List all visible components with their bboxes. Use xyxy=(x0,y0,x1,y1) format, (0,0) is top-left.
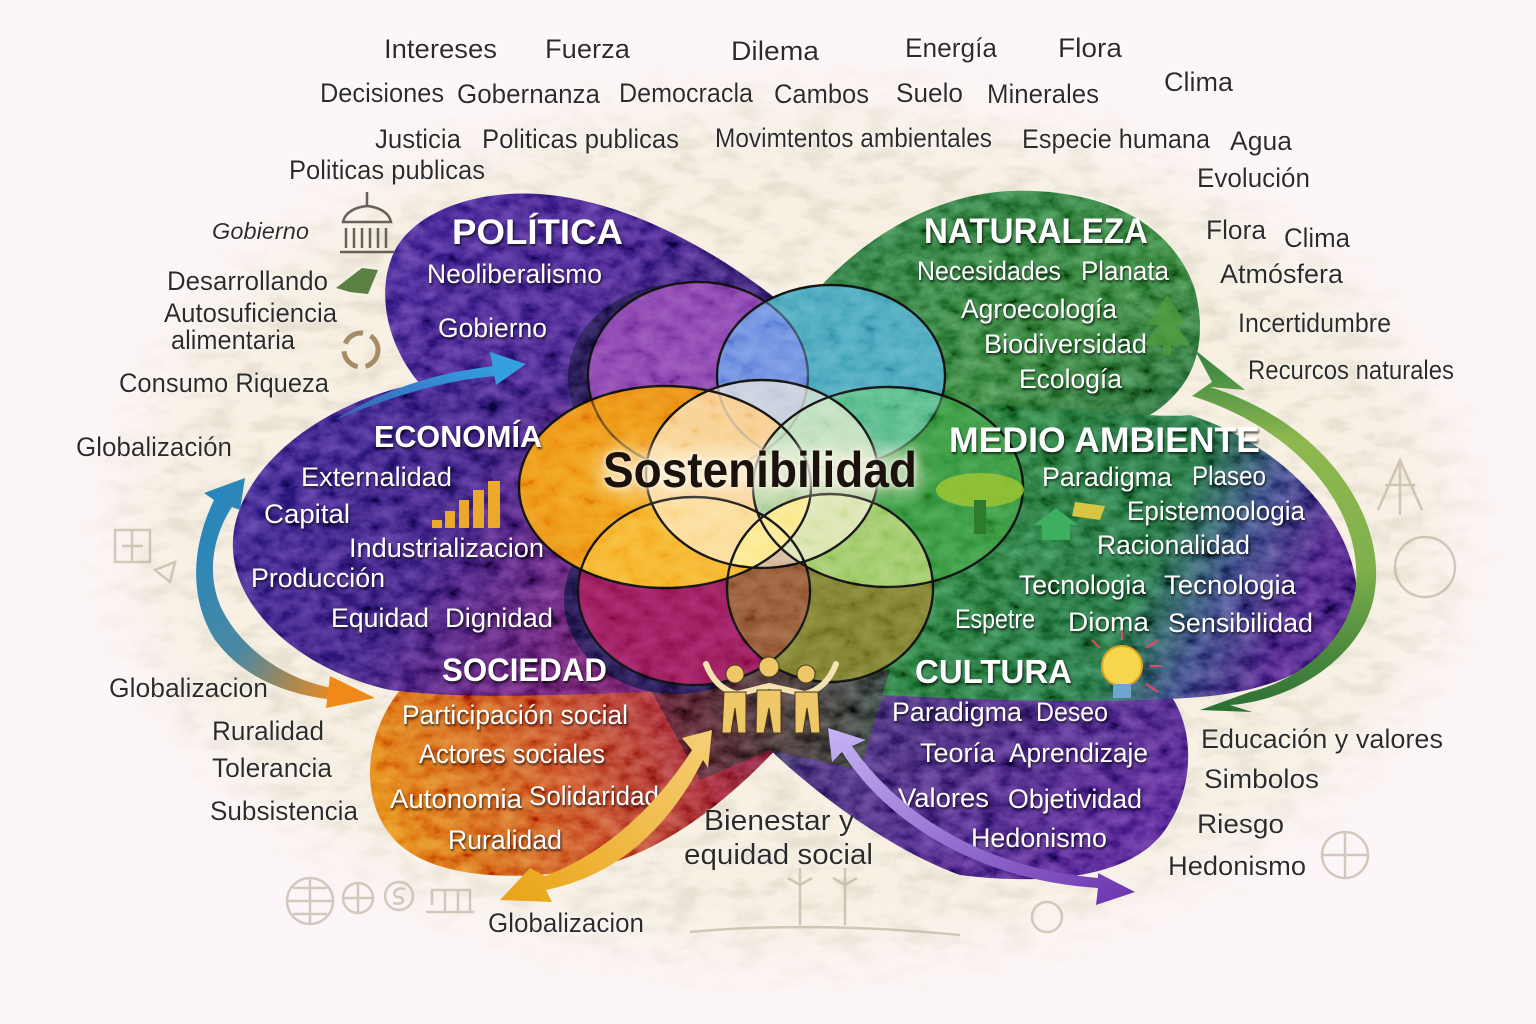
top keyword cloud: Decisiones xyxy=(320,78,444,108)
panel labels: Cultura: Paradigma xyxy=(892,697,1023,727)
panel labels: Economía: Capital xyxy=(264,499,350,529)
top keyword cloud xyxy=(289,33,1310,193)
panel labels: Economía: ECONOMÍA xyxy=(374,419,542,454)
right keyword cloud: Recurcos naturales xyxy=(1248,355,1454,385)
petal: Medio ambiente xyxy=(800,400,1357,701)
right keyword cloud: Educación y valores xyxy=(1201,724,1443,754)
lens overlap: centre, orange and olive xyxy=(732,497,809,566)
panel labels: Cultura: Valores xyxy=(898,783,989,813)
icon: recycle xyxy=(344,333,378,367)
panel labels: Medio ambiente: Tecnologia xyxy=(1164,570,1297,600)
panel labels: Naturaleza: Biodiversidad xyxy=(984,329,1147,359)
arrow: Naturaleza to Cultura xyxy=(1192,350,1376,712)
top keyword cloud: Flora xyxy=(1058,33,1123,63)
panel labels: Medio ambiente: MEDIO AMBIENTE xyxy=(949,421,1260,460)
arrow: Economía to Sociedad (double head) xyxy=(196,478,375,708)
top keyword cloud: Clima xyxy=(1164,67,1234,97)
bottom keywords: equidad social xyxy=(684,839,873,871)
right keyword cloud: Incertidumbre xyxy=(1238,308,1391,338)
panel labels: Economía xyxy=(251,419,553,633)
faint background icons xyxy=(115,460,1455,935)
panel labels: Naturaleza: Necesidades xyxy=(917,256,1061,286)
icon: book xyxy=(1072,502,1105,520)
panel labels: Naturaleza: Ecología xyxy=(1019,364,1123,394)
central overlapping lenses xyxy=(519,282,1023,685)
panel labels: Sociedad: Participación social xyxy=(402,700,628,730)
icon: house xyxy=(1034,508,1078,540)
left keyword cloud: Subsistencia xyxy=(210,796,359,826)
top keyword cloud: Minerales xyxy=(987,79,1099,109)
panel labels: Medio ambiente: Sensibilidad xyxy=(1168,608,1313,638)
icon: people group xyxy=(706,657,836,733)
panel labels: Medio ambiente: Dioma xyxy=(1068,607,1150,637)
top keyword cloud: Energía xyxy=(905,33,998,63)
panel labels: Cultura: Objetividad xyxy=(1008,784,1142,814)
panel labels: Economía: Industrializacion xyxy=(349,533,544,563)
lens outlines xyxy=(519,380,1023,685)
panel labels: Política: Neoliberalismo xyxy=(427,259,602,289)
panel labels: Política: Gobierno xyxy=(438,313,547,343)
lens: olive xyxy=(727,494,933,682)
panel labels: Medio ambiente: Epistemoologia xyxy=(1127,496,1306,526)
lens overlap: orange and crimson xyxy=(582,499,758,587)
panel labels: Sociedad: Autonomia xyxy=(390,784,523,814)
left keyword cloud: Autosuficiencia xyxy=(164,298,338,328)
panel labels: Cultura: Hedonismo xyxy=(971,823,1107,853)
lens: crimson xyxy=(578,497,810,685)
left keyword cloud xyxy=(76,218,359,826)
lens: orange xyxy=(519,386,811,588)
lens: green xyxy=(753,387,1023,587)
icon: tree Medio ambiente xyxy=(936,473,1024,534)
dark patch under the lower lenses xyxy=(640,670,890,780)
panel labels: Cultura xyxy=(892,653,1148,853)
panel labels: Cultura: Deseo xyxy=(1036,697,1108,727)
right keyword cloud: Atmósfera xyxy=(1220,259,1344,289)
icon: tree Naturaleza xyxy=(1144,295,1190,355)
panel labels: Economía: Dignidad xyxy=(445,603,553,633)
panel labels: Naturaleza: NATURALEZA xyxy=(924,212,1148,251)
panel labels: Política: POLÍTICA xyxy=(452,212,623,252)
top keyword cloud: Cambos xyxy=(774,79,869,109)
lens: teal xyxy=(717,285,945,467)
panel labels: Cultura: Aprendizaje xyxy=(1009,738,1148,768)
petal texture overlay xyxy=(220,180,1370,890)
left keyword cloud: Globalización xyxy=(76,432,232,462)
panel labels: Naturaleza xyxy=(917,212,1170,394)
top keyword cloud: Agua xyxy=(1230,126,1293,156)
panel labels: Cultura: CULTURA xyxy=(915,653,1072,690)
top keyword cloud: Democracla xyxy=(619,78,754,108)
dark shadow crescents behind the lenses xyxy=(564,284,792,694)
top keyword cloud: Evolución xyxy=(1197,163,1310,193)
icon: light bulb xyxy=(1092,630,1162,698)
left keyword cloud: Globalizacion xyxy=(109,673,268,703)
top keyword cloud: Fuerza xyxy=(545,34,631,64)
panel labels: Medio ambiente: Paradigma xyxy=(1042,462,1173,492)
panel labels: Medio ambiente: Plaseo xyxy=(1192,461,1266,491)
bottom keywords: Bienestar y xyxy=(704,805,855,837)
top keyword cloud: Dilema xyxy=(731,36,820,66)
right keyword cloud: Riesgo xyxy=(1197,809,1284,839)
left keyword cloud: Ruralidad xyxy=(212,716,324,746)
icon: bar chart xyxy=(432,481,500,528)
petal: Economía xyxy=(233,381,700,696)
panel labels: Sociedad: Ruralidad xyxy=(448,825,562,855)
left keyword cloud: Gobierno xyxy=(212,218,309,244)
panel labels: Medio ambiente: Racionalidad xyxy=(1097,530,1250,560)
icon: government building xyxy=(340,192,394,252)
panel labels: Cultura: Teoría xyxy=(920,738,996,768)
top keyword cloud: Suelo xyxy=(896,78,963,108)
lens: centre xyxy=(646,380,878,568)
purple and teal edges seen through the upper lenses xyxy=(588,282,945,470)
petal: Sociedad xyxy=(370,660,780,876)
panel labels: Sociedad: SOCIEDAD xyxy=(442,652,607,688)
panel labels: Medio ambiente: Tecnologia xyxy=(1019,570,1147,600)
top keyword cloud: Especie humana xyxy=(1022,124,1211,154)
petal: Política xyxy=(385,193,790,420)
left keyword cloud: Consumo Riqueza xyxy=(119,368,330,398)
panel labels: Sociedad: Actores sociales xyxy=(419,739,605,769)
bottom keywords xyxy=(488,805,873,938)
arrow: Cultura to Hedonismo (double head) xyxy=(828,728,1135,905)
lens overlap: purple and teal xyxy=(716,302,808,424)
right keyword cloud xyxy=(1168,215,1454,881)
panel labels: Medio ambiente xyxy=(949,421,1313,638)
top keyword cloud: Politicas publicas xyxy=(289,155,485,185)
left keyword cloud: alimentaria xyxy=(171,325,296,355)
panel labels: Medio ambiente: Espetre xyxy=(955,604,1035,634)
right keyword cloud: Hedonismo xyxy=(1168,851,1306,881)
arrow: Economía to Política xyxy=(335,352,526,420)
panel labels: Economía: Producción xyxy=(251,563,385,593)
lens overlap: crimson and olive xyxy=(728,550,809,658)
bottom keywords: Globalizacion xyxy=(488,908,644,938)
petal: Cultura xyxy=(760,670,1188,879)
lens texture overlay xyxy=(510,270,1030,700)
top keyword cloud: Intereses xyxy=(384,34,497,64)
right keyword cloud: Flora xyxy=(1206,215,1267,245)
top keyword cloud: Politicas publicas xyxy=(482,124,679,154)
panel labels: Naturaleza: Planata xyxy=(1081,256,1170,286)
lens: purple xyxy=(588,282,808,470)
right keyword cloud: Simbolos xyxy=(1204,764,1319,794)
lens overlap: green and olive xyxy=(783,495,932,586)
top keyword cloud: Gobernanza xyxy=(457,79,601,109)
panel labels: Economía: Externalidad xyxy=(301,462,452,492)
right keyword cloud: Clima xyxy=(1284,223,1351,253)
petal: Naturaleza xyxy=(808,191,1200,450)
arrow: Sociedad to Globalización (double head) xyxy=(500,730,712,902)
left keyword cloud: Tolerancia xyxy=(212,753,333,783)
panel labels: Naturaleza: Agroecología xyxy=(961,294,1118,324)
panel labels: Economía: Equidad xyxy=(331,603,429,633)
panel labels: Política xyxy=(427,212,623,343)
title glow band xyxy=(600,450,920,492)
panel labels: Sociedad xyxy=(390,652,659,855)
top keyword cloud: Justicia xyxy=(375,124,462,154)
title: Sostenibilidad: Sostenibilidad xyxy=(603,442,917,498)
icon: money plant xyxy=(336,268,378,294)
lens overlap: green and teal xyxy=(765,388,942,466)
top keyword cloud: Movimtentos ambientales xyxy=(715,123,992,153)
panel labels: Sociedad: Solidaridad xyxy=(529,781,659,811)
left keyword cloud: Desarrollando xyxy=(167,266,328,296)
